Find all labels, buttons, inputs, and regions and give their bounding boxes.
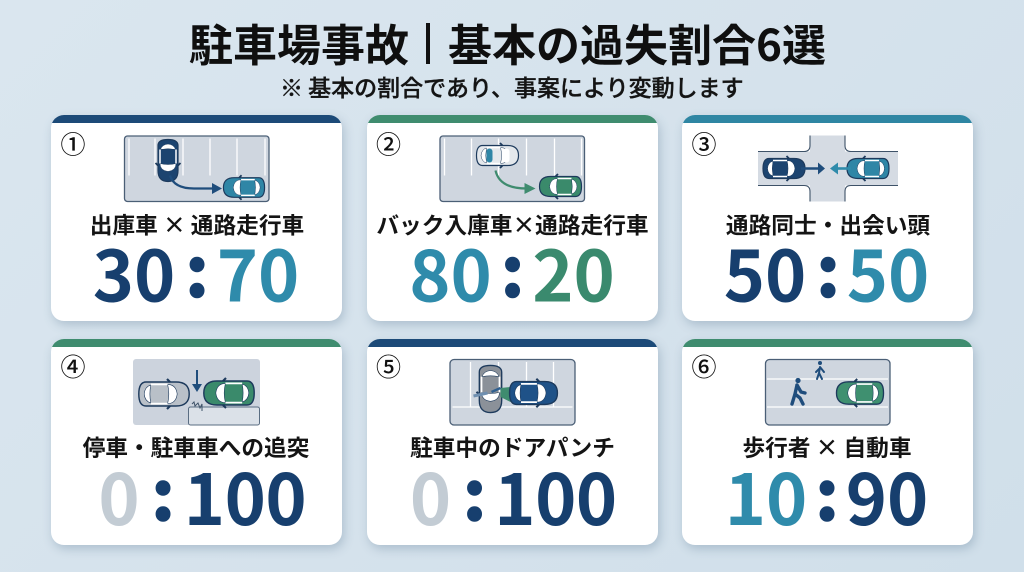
panel: card 4 bbox=[51, 339, 342, 545]
number badge 3: ③ bbox=[691, 125, 717, 161]
number badge 2: ② bbox=[375, 125, 401, 161]
ratio 50:50: : bbox=[817, 217, 839, 316]
ratio 10:90: 90 bbox=[846, 445, 928, 545]
ratio 0:100: 0 bbox=[98, 445, 140, 545]
ratio 0:100: : bbox=[463, 441, 485, 540]
ratio 0:100 bbox=[98, 441, 306, 546]
illustration: backing into space bbox=[440, 136, 584, 201]
ratio 30:70: : bbox=[186, 217, 208, 316]
ratio 0:100: 0 bbox=[409, 445, 451, 545]
top bar navy bbox=[51, 114, 342, 122]
number badge 6: ⑥ bbox=[691, 348, 717, 384]
label: バック入庫車×通路走行車 bbox=[376, 207, 648, 240]
label: 出庫車 × 通路走行車 bbox=[90, 207, 304, 240]
number badge 5: ⑤ bbox=[375, 348, 401, 384]
ratio 0:100 bbox=[409, 441, 616, 546]
ratio 10:90: 10 bbox=[725, 445, 807, 545]
illustration: door punch bbox=[450, 360, 574, 425]
ratio 0:100: : bbox=[152, 441, 174, 540]
ratio 80:20: : bbox=[501, 217, 523, 316]
top bar teal bbox=[682, 114, 973, 122]
title bbox=[189, 10, 826, 74]
title: 基本の過失割合6選 bbox=[448, 10, 826, 74]
label: 停車・駐車車への追突 bbox=[83, 430, 310, 463]
panel: card 6 bbox=[682, 339, 973, 545]
ratio 30:70 bbox=[93, 217, 299, 322]
ratio 80:20: 20 bbox=[532, 221, 614, 320]
panel: card 5 bbox=[366, 339, 658, 545]
top bar green bbox=[682, 339, 973, 347]
ratio 30:70: 30 bbox=[93, 221, 175, 320]
illustration: leaving parking space bbox=[124, 136, 269, 201]
subtitle note: ※ 基本の割合であり、事案により変動します bbox=[280, 69, 744, 103]
ratio 10:90 bbox=[725, 441, 928, 546]
top bar green bbox=[366, 114, 658, 122]
ratio 80:20: 80 bbox=[409, 221, 491, 320]
label: 通路同士・出会い頭 bbox=[726, 207, 930, 240]
ratio 30:70: 70 bbox=[217, 221, 299, 320]
ratio 80:20 bbox=[409, 217, 614, 322]
number badge 4: ④ bbox=[60, 348, 86, 384]
panel: card 1 bbox=[51, 114, 342, 320]
ratio 50:50 bbox=[724, 217, 929, 322]
label: 駐車中のドアパンチ bbox=[410, 430, 614, 463]
ratio 50:50: 50 bbox=[724, 221, 806, 320]
ratio 50:50: 50 bbox=[847, 221, 929, 320]
top bar green bbox=[51, 339, 342, 347]
illustration: crossing aisles bbox=[758, 135, 898, 201]
top bar navy bbox=[366, 339, 658, 347]
label: 歩行者 × 自動車 bbox=[742, 430, 912, 463]
panel: card 3 bbox=[682, 114, 973, 320]
illustration: pedestrians and car bbox=[766, 360, 890, 425]
ratio 0:100: 100 bbox=[184, 445, 306, 545]
title: 駐車場事故 bbox=[189, 10, 409, 74]
panel: card 2 bbox=[366, 114, 658, 320]
ratio 10:90: : bbox=[816, 441, 838, 540]
number badge 1: ① bbox=[60, 125, 86, 161]
ratio 0:100: 100 bbox=[494, 445, 616, 545]
illustration: rear-end into stopped car bbox=[133, 359, 260, 425]
